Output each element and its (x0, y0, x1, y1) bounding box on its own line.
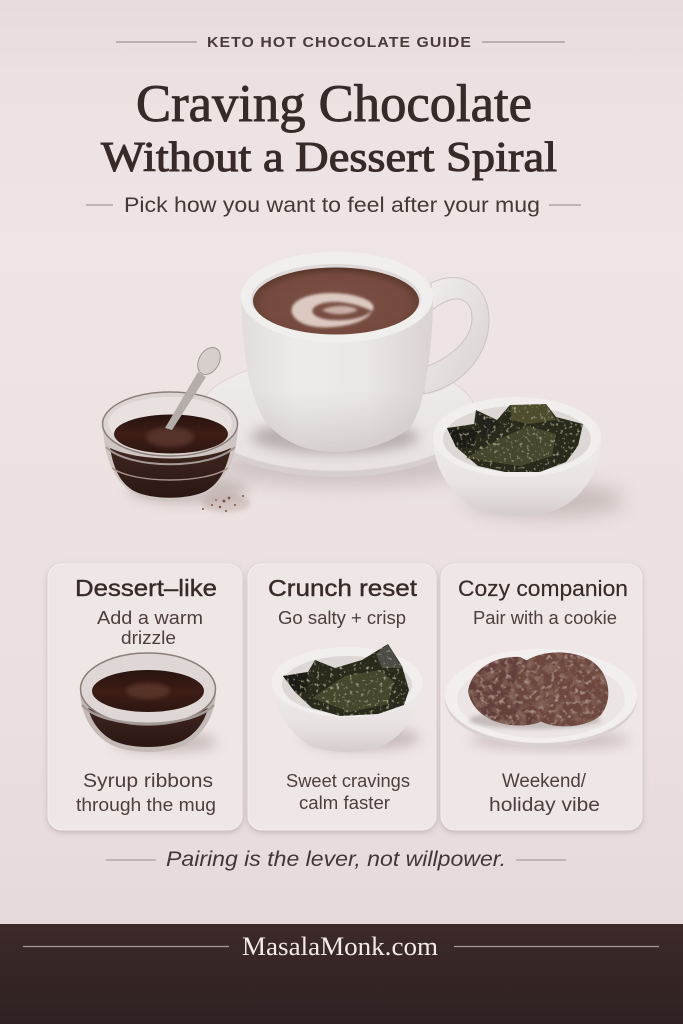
card: Dessert-like (48, 564, 242, 830)
card result (286, 770, 410, 813)
title (101, 75, 557, 181)
card: Crunch reset (248, 564, 436, 830)
cocoa surface with swirl (253, 268, 419, 334)
cookie plate (445, 649, 637, 749)
footer site name: MasalaMonk.com (242, 932, 438, 961)
title: Without a Dessert Spiral (101, 135, 557, 181)
tagline: Pairing is the lever, not willpower. (166, 847, 506, 871)
card result: Sweet cravings (286, 770, 410, 791)
cookies (468, 652, 608, 726)
nori pieces (283, 644, 409, 716)
footer band (0, 924, 683, 1024)
card heading: Crunch reset (268, 575, 418, 601)
hero: mug with saucer, syrup and nori (198, 252, 489, 486)
card prompt: Add a warm (97, 608, 203, 628)
nori pieces (447, 404, 583, 472)
card: Cozy companion (441, 564, 642, 830)
cocoa dust (202, 494, 250, 512)
card prompt (97, 608, 203, 648)
card result: holiday vibe (489, 795, 600, 816)
option cards (48, 564, 642, 830)
card result (489, 771, 600, 816)
saucer (198, 357, 476, 486)
eyebrow: guide label: KETO HOT CHOCOLATE GUIDE (207, 35, 472, 51)
syrup bowl (80, 653, 217, 752)
spoon (165, 343, 225, 430)
subtitle: Pick how you want to feel after your mug (124, 193, 540, 217)
card prompt: Pair with a cookie (473, 608, 617, 628)
syrup glass bowl with spoon (102, 343, 248, 503)
card heading: Cozy companion (458, 576, 628, 601)
card prompt: drizzle (121, 628, 176, 648)
card result (76, 771, 216, 815)
card prompt: Go salty + crisp (278, 608, 406, 628)
card result: Syrup ribbons (83, 771, 213, 792)
card heading: Dessert–like (75, 575, 217, 601)
nori bowl (272, 644, 423, 752)
card result: Weekend/ (502, 771, 587, 792)
card result: calm faster (299, 792, 390, 813)
mug (241, 252, 489, 452)
card result: through the mug (76, 794, 216, 815)
title: Craving Chocolate (136, 75, 532, 133)
nori bowl (433, 397, 625, 516)
